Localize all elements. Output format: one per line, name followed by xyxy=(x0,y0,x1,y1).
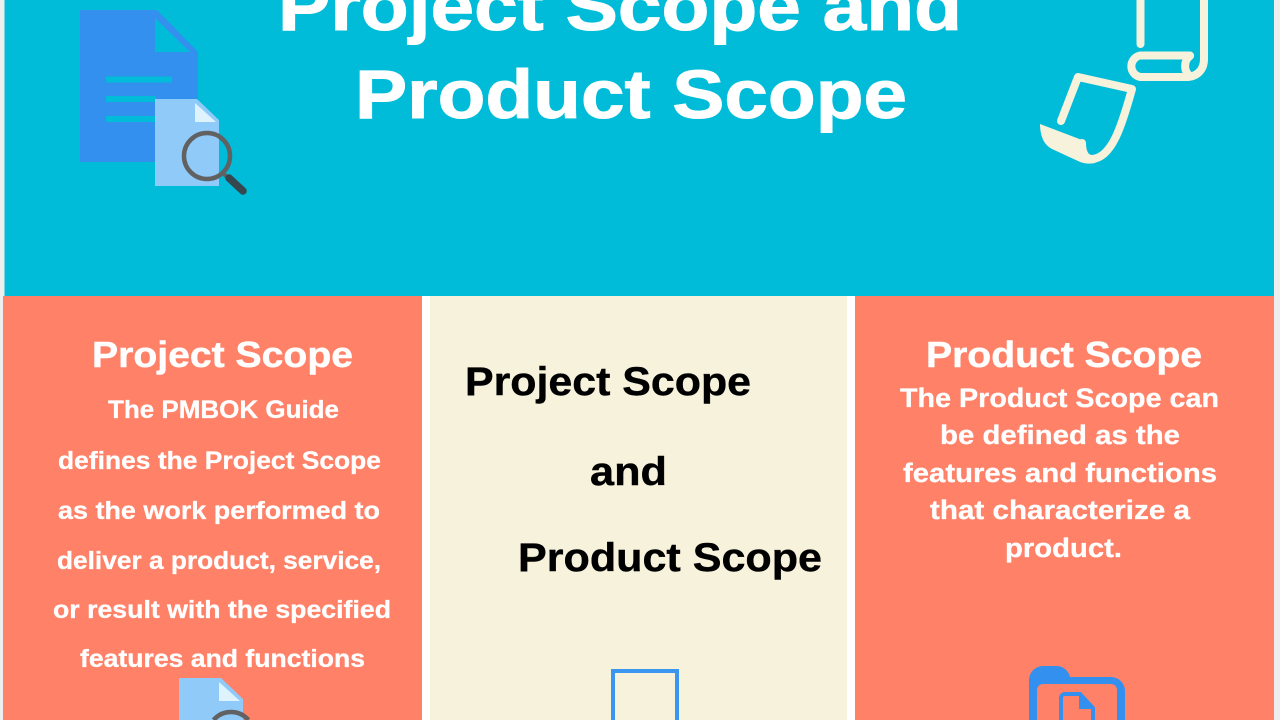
divider: left white gutter xyxy=(422,296,430,720)
panel: centre comparison xyxy=(430,296,847,720)
text block: project scope definition: defines the Project Scope xyxy=(58,447,381,475)
heading: project scope and product scope: and xyxy=(590,450,667,494)
text block: product scope definition: that characterize a xyxy=(930,495,1191,525)
heading: project scope and product scope: Product Scope xyxy=(518,536,822,580)
text block: project scope definition: features and functions xyxy=(80,645,365,673)
icon: paper scrolls xyxy=(1040,0,1204,164)
heading: product scope: Product Scope xyxy=(926,334,1202,375)
text block: project scope definition xyxy=(53,396,391,673)
title: Product Scope xyxy=(355,56,907,133)
icon: documents with magnifier xyxy=(80,10,243,191)
heading: project scope: Project Scope xyxy=(92,334,353,375)
text block: product scope definition xyxy=(900,383,1219,563)
heading: project scope and product scope: Project Scope xyxy=(465,360,751,404)
text block: project scope definition: The PMBOK Guide xyxy=(108,396,339,424)
heading: project scope and product scope xyxy=(465,360,822,580)
icon: document with magnifier xyxy=(179,678,248,720)
text block: project scope definition: as the work performed to xyxy=(58,497,380,525)
text block: product scope definition: features and functions xyxy=(903,458,1217,488)
icon: folder with document xyxy=(1029,666,1125,720)
text block: product scope definition: The Product Scope can xyxy=(900,383,1219,413)
text block: product scope definition: be defined as the xyxy=(940,420,1180,450)
icon: blue outlined page xyxy=(613,671,677,720)
panel: header banner xyxy=(4,0,1274,296)
panel: product scope xyxy=(855,296,1274,720)
title xyxy=(278,0,962,133)
divider: right white gutter xyxy=(847,296,855,720)
text block: project scope definition: or result with the specified xyxy=(53,596,391,624)
text block: project scope definition: deliver a product, service, xyxy=(57,547,381,575)
panel: project scope xyxy=(3,296,422,720)
text block: product scope definition: product. xyxy=(1005,533,1122,563)
